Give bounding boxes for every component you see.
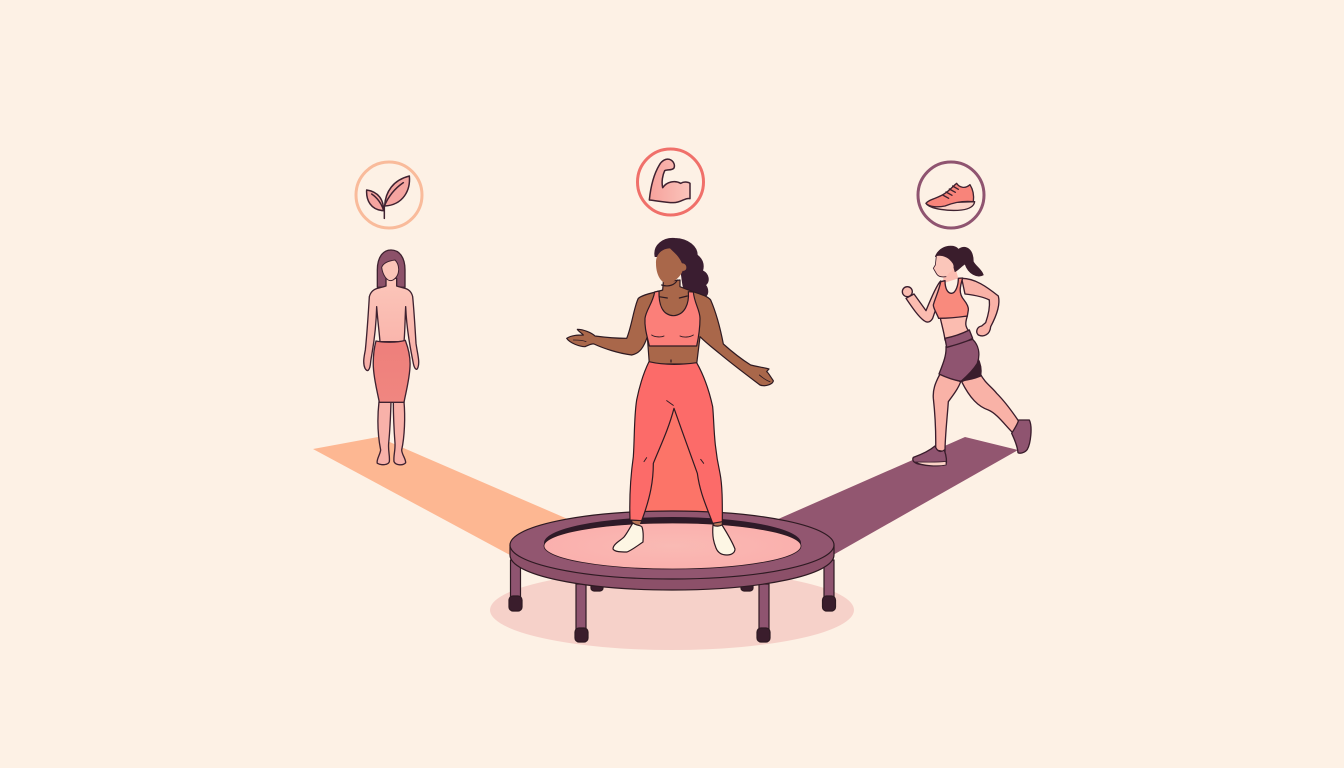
midriff: [940, 316, 969, 340]
icon: leaf badge: [356, 162, 422, 228]
sports bra: [645, 291, 700, 346]
back leg: [962, 373, 1019, 433]
back shoe: [1012, 420, 1031, 453]
left leg: [377, 402, 391, 465]
path: centre coral: [630, 405, 715, 520]
frame side: [510, 545, 834, 590]
back feet: [591, 583, 603, 591]
shorts: [939, 339, 979, 381]
figure: right woman running: [902, 246, 1031, 466]
face profile line: [933, 256, 946, 277]
body skin: [364, 278, 419, 371]
face: [382, 260, 399, 281]
waistband: [945, 330, 973, 347]
left shoe: [613, 523, 643, 552]
rubber feet: [509, 596, 522, 611]
floor shadow under trampoline: [490, 570, 854, 650]
mat: [544, 517, 801, 569]
frame top: [510, 511, 834, 579]
icon: running shoe badge: [918, 162, 984, 228]
figure: left woman standing: [364, 250, 419, 465]
ankles: [631, 518, 722, 526]
icon: flexed arm badge: [638, 149, 704, 215]
hair and ponytail: [935, 246, 983, 276]
leggings: [630, 362, 722, 523]
hair: [377, 250, 405, 287]
rear arm: [962, 278, 999, 336]
arms and torso skin: [567, 280, 773, 386]
shorts dark panel: [962, 357, 981, 381]
path: right plum: [776, 437, 1018, 555]
skirt: [373, 340, 410, 402]
neck: [943, 267, 958, 283]
fist: [902, 287, 912, 297]
legs: [510, 560, 520, 598]
face: [656, 248, 686, 283]
front shoe sole: [915, 461, 946, 466]
path: left orange: [313, 437, 570, 555]
front shoe: [913, 446, 947, 466]
hair back and curls: [655, 238, 708, 297]
right shoe: [713, 525, 735, 555]
right leg: [393, 402, 406, 465]
trampoline: [509, 511, 836, 642]
crop top: [933, 278, 968, 318]
front arm: [906, 281, 945, 322]
face: [933, 256, 954, 277]
front leg: [933, 374, 961, 452]
figure: centre woman on trampoline: [567, 238, 773, 555]
